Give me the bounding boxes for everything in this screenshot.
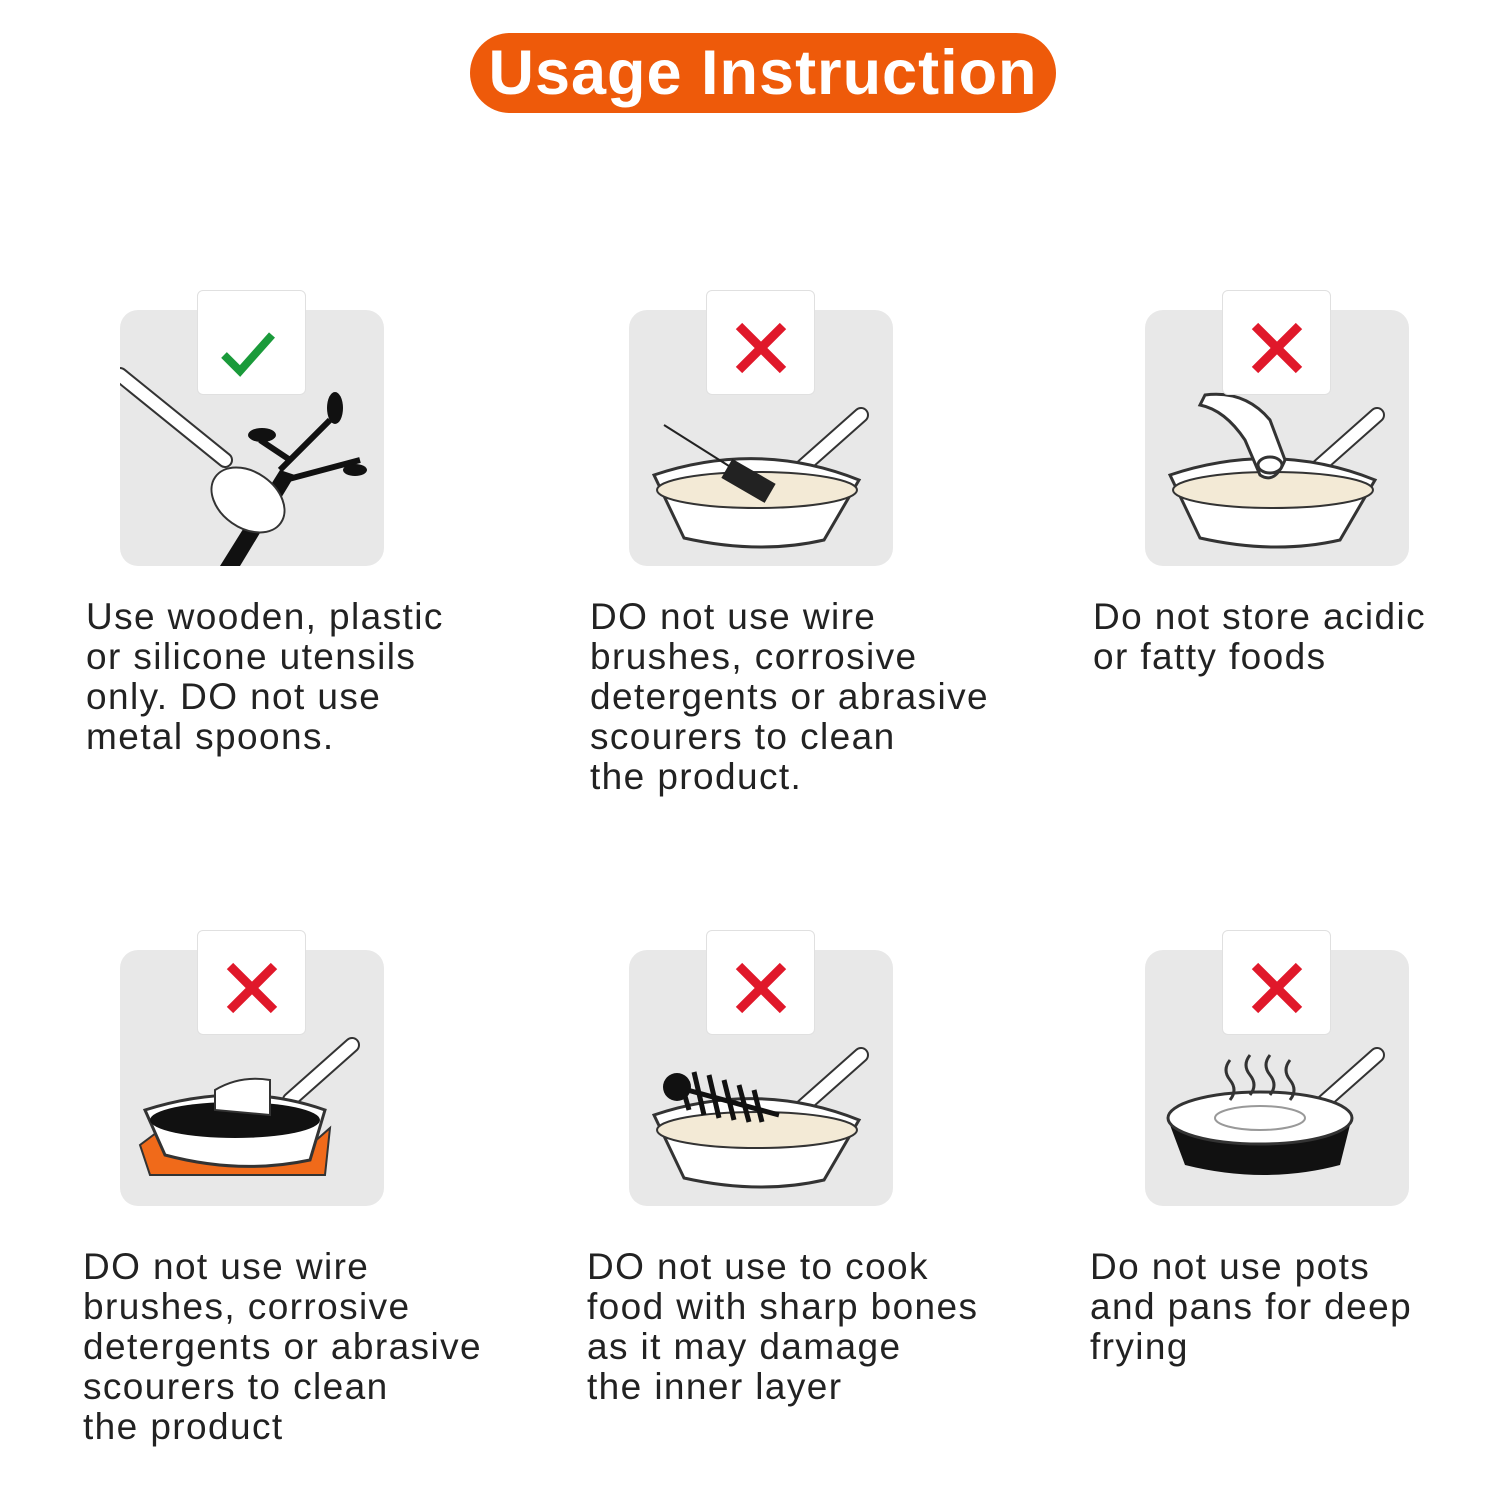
text: wire brushes: brushes, corrosive xyxy=(590,636,918,677)
icon: cross xyxy=(1252,322,1302,374)
panel: wire brushes xyxy=(629,290,893,566)
text: wire brushes xyxy=(590,596,989,797)
text: deep frying: frying xyxy=(1090,1326,1189,1367)
text: wire brushes: DO not use wire xyxy=(590,596,876,637)
text: deep frying: Do not use pots xyxy=(1090,1246,1370,1287)
text: wire brushes 2: DO not use wire xyxy=(83,1246,369,1287)
text: wooden utensils: metal spoons. xyxy=(86,716,335,757)
icon: cross xyxy=(1252,962,1302,1014)
text: wire brushes: detergents or abrasive xyxy=(590,676,989,717)
icon: pan with steam xyxy=(1166,1047,1385,1175)
panel: acidic foods xyxy=(1145,290,1409,566)
text: sharp bones xyxy=(587,1246,978,1407)
panel: sharp bones xyxy=(629,930,893,1206)
text: acidic foods xyxy=(1093,596,1426,677)
icon: cross xyxy=(226,962,278,1014)
panel: deep frying xyxy=(1145,930,1409,1206)
icon: check xyxy=(221,332,275,377)
text: wire brushes 2 xyxy=(83,1246,482,1447)
icon: spoon and branch xyxy=(120,367,367,566)
text: acidic foods: Do not store acidic xyxy=(1093,596,1426,637)
title: Usage Instruction xyxy=(488,38,1038,108)
icon: cross xyxy=(736,322,786,374)
text: wooden utensils: or silicone utensils xyxy=(86,636,416,677)
text: wire brushes: the product. xyxy=(590,756,802,797)
text: deep frying xyxy=(1090,1246,1412,1367)
text: wire brushes 2: brushes, corrosive xyxy=(83,1286,410,1327)
icon: cross xyxy=(736,962,786,1014)
text: wire brushes 2: detergents or abrasive xyxy=(83,1326,482,1367)
text: acidic foods: or fatty foods xyxy=(1093,636,1326,677)
text: wooden utensils xyxy=(86,596,444,757)
text: sharp bones: as it may damage xyxy=(587,1326,901,1367)
text: sharp bones: food with sharp bones xyxy=(587,1286,978,1327)
text: sharp bones: DO not use to cook xyxy=(587,1246,929,1287)
text: wooden utensils: Use wooden, plastic xyxy=(86,596,444,637)
icon: pan with drumstick xyxy=(1168,392,1385,548)
icon: pan with brush xyxy=(652,407,869,548)
text: wire brushes 2: scourers to clean xyxy=(83,1366,389,1407)
text: deep frying: and pans for deep xyxy=(1090,1286,1412,1327)
panel: empty heating xyxy=(120,930,384,1206)
text: sharp bones: the inner layer xyxy=(587,1366,842,1407)
text: wooden utensils: only. DO not use xyxy=(86,676,381,717)
icon: pan with fish bones xyxy=(652,1047,869,1188)
panel: wooden utensils xyxy=(120,290,384,566)
text: wire brushes: scourers to clean xyxy=(590,716,896,757)
text: wire brushes 2: the product xyxy=(83,1406,284,1447)
icon: pan on fire xyxy=(138,1037,360,1176)
